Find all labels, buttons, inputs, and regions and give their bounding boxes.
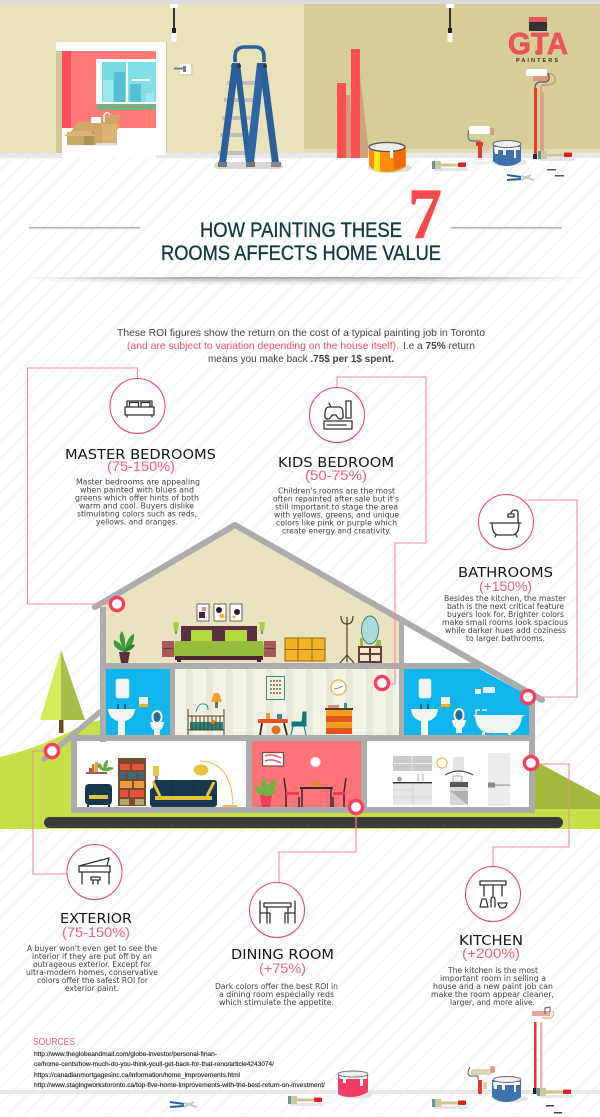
body text: interior if they are put off by an (32, 952, 152, 961)
connector line (33, 751, 67, 874)
brush (537, 1088, 573, 1098)
sources: SOURCES (33, 1036, 75, 1048)
ceiling lamps (170, 4, 454, 42)
teal chair (291, 712, 306, 735)
body text: warm and cool. Buyers dislike (79, 502, 194, 510)
screws (547, 169, 564, 176)
body text (75, 478, 200, 526)
roller (468, 1066, 495, 1094)
dining room (252, 741, 361, 807)
living room (76, 741, 246, 807)
oval mirror (362, 616, 378, 644)
heading: KITCHEN (459, 933, 523, 949)
attic furniture (114, 604, 382, 663)
body text: yellows, and oranges. (96, 518, 178, 526)
body text: Besides the kitchen, the master (444, 594, 567, 603)
wall lamp (211, 693, 222, 708)
ground and hills (0, 720, 600, 829)
body text: a dining room especially reds (219, 990, 334, 999)
right bathroom fixtures (411, 679, 525, 735)
plant (114, 631, 135, 663)
icon: piano (67, 844, 122, 900)
connector line (279, 815, 356, 883)
small yellow lamp (153, 766, 159, 782)
floor lamp (194, 761, 237, 807)
intro text: I.e a 75% return (403, 341, 475, 352)
yellow dresser (285, 638, 325, 661)
nursery wall (175, 669, 399, 736)
connector line (525, 500, 577, 697)
tree (40, 650, 85, 733)
header scene (0, 0, 600, 180)
body text: often repainted after sale but it's (273, 494, 399, 504)
title block: HOW PAINTING THESE (200, 219, 402, 242)
intro text (117, 328, 485, 365)
sources (33, 1036, 325, 1089)
icon: bed (110, 378, 165, 434)
body text: A buyer won't even get to see the (27, 944, 157, 953)
roof (95, 525, 542, 700)
percentage: (+200%) (462, 945, 520, 961)
body text: while darker hues add coziness (445, 626, 566, 635)
intro text: These ROI figures show the return on the cost of a typical painting job in Toronto (117, 328, 485, 339)
title shadow (20, 277, 590, 285)
panel: kids bedroom (273, 377, 426, 684)
body text: outrageous exterior. Except for (33, 960, 152, 969)
body text: buyers look for. Brighter colors (447, 610, 564, 619)
body text: larger, and more alive. (450, 998, 535, 1007)
body text: Master bedrooms are appealing (76, 478, 200, 486)
body text: house and a new paint job can (433, 982, 553, 991)
pliers (170, 1102, 197, 1107)
intro text: (and are subject to variation depending on the house itself). (127, 341, 399, 352)
attic room (103, 525, 401, 663)
house (44, 525, 542, 813)
panel: exterior (26, 751, 158, 993)
intro text: means you make back .75$ per 1$ spent. (208, 354, 394, 365)
blue paint can (491, 140, 527, 166)
body text: important room in selling a (440, 974, 546, 983)
shelf unit (358, 638, 382, 663)
body text: greens which offer hints of both (75, 494, 199, 502)
brush (288, 1096, 324, 1106)
doorway with view into room (56, 42, 167, 158)
small brush (432, 161, 468, 171)
percentage: (75-150%) (107, 458, 175, 474)
body text: exterior paint. (65, 984, 119, 993)
footer tools (170, 1007, 573, 1114)
alphabet poster (266, 676, 284, 700)
crib (188, 704, 224, 735)
sources: ce/home-cents/how-much-do-you-think-youll-get-back-for-that-reno/article4243074/ (34, 1061, 274, 1068)
left bathroom fixtures (108, 679, 164, 735)
pliers (507, 175, 534, 180)
armchair (85, 784, 112, 807)
heading: EXTERIOR (60, 911, 133, 927)
play table (258, 713, 288, 735)
brush (432, 1099, 468, 1109)
connector line (493, 764, 569, 867)
body text: colors like pink or purple which (276, 518, 397, 528)
bathroom right (404, 669, 529, 736)
wall pictures (197, 604, 242, 621)
icon: utensils (466, 866, 520, 922)
plant (255, 778, 277, 807)
wall clock (331, 680, 346, 695)
range and hood (445, 757, 473, 805)
percentage: (+75%) (259, 960, 306, 976)
body text: to larger bathrooms. (466, 634, 545, 643)
dining set (284, 778, 346, 807)
body text: when painted with blues and (80, 486, 194, 494)
wall switch (174, 64, 193, 76)
heading: BATHROOMS (458, 565, 553, 581)
small roller (468, 126, 494, 165)
red drawers (325, 703, 353, 734)
panel: kitchen (431, 764, 569, 1007)
body text (215, 982, 338, 1007)
icon: bathtub (478, 494, 534, 550)
body text: make small rooms look spacious (442, 618, 568, 627)
screws (546, 1105, 562, 1114)
road (44, 817, 563, 828)
percentage: (75-150%) (62, 924, 130, 940)
living room furniture (85, 758, 237, 807)
body text: Children's rooms are the most (278, 486, 395, 496)
body text: stimulating colors such as reds, (77, 510, 197, 518)
counter (393, 774, 432, 805)
orange paint can (368, 142, 412, 173)
body text: make the room appear cleaner, (431, 990, 554, 999)
cardboard boxes (64, 112, 122, 146)
bookcase (118, 758, 146, 806)
kitchen clock (437, 758, 447, 768)
body text (26, 944, 158, 993)
body text: which stimulate the appetite. (219, 998, 334, 1007)
wall shelf (86, 760, 114, 774)
sources: http://www.stagingworkstoronto.ca/top-five-home-improvements-with-the-best-return-on-investment/ (34, 1082, 325, 1089)
heading: KIDS BEDROOM (278, 455, 394, 471)
sofa (150, 780, 217, 807)
connector dots (45, 597, 538, 814)
icon: dining table (250, 882, 304, 938)
coat rack (340, 616, 354, 663)
kitchen room (367, 741, 529, 807)
body text: still important to stage the area (275, 502, 398, 512)
panel: dining room (215, 815, 356, 1007)
body text (431, 966, 554, 1007)
heading: MASTER BEDROOMS (65, 447, 216, 463)
tall rollers (532, 1007, 554, 1094)
sources: http://www.theglobeandmail.com/globe-investor/personal-finan- (34, 1051, 217, 1058)
title block: 7 (408, 174, 442, 254)
ladder (214, 47, 283, 169)
body text: bath is the next critical feature (447, 602, 564, 611)
body text: create energy and creativity. (282, 526, 391, 536)
connector line (337, 377, 426, 684)
icon: game console (310, 388, 364, 442)
logo: PAINTERS (516, 58, 558, 64)
clock (311, 757, 320, 767)
tall paint rollers (526, 69, 555, 159)
bed (173, 626, 265, 662)
logo: GTA (508, 26, 568, 61)
dining room furniture (255, 752, 346, 807)
house frame (71, 607, 535, 813)
body text: The kitchen is the most (447, 966, 538, 975)
bathroom left (105, 669, 170, 736)
kitchen furniture (393, 753, 510, 806)
nursery furniture (188, 676, 353, 735)
footer baseboard (0, 1090, 600, 1094)
picture (262, 752, 284, 766)
body text: Dark colors offer the best ROI in (215, 982, 338, 991)
percentage: (50-75%) (305, 467, 367, 483)
upper cabinets (393, 756, 432, 771)
wide brush (538, 151, 574, 161)
red paint swatches (337, 49, 368, 158)
pink paint can (338, 1071, 372, 1098)
blue paint can (492, 1076, 528, 1102)
body text: colors offer the safest ROI for (37, 976, 149, 985)
sources: https://canadianmortgagesinc.ca/information/home_improvements.html (34, 1072, 241, 1079)
nightstands and lamps (162, 622, 276, 657)
panel: master bedrooms (28, 368, 216, 604)
body text: with yellows, greens, and unique (274, 510, 399, 520)
panel: bathrooms (442, 494, 577, 697)
attic side gap (404, 622, 470, 663)
body text (273, 486, 399, 536)
title block (29, 174, 562, 265)
fridge (488, 753, 510, 806)
body text (442, 594, 568, 643)
percentage: (+150%) (479, 578, 532, 594)
body text: ultra-modern homes, conservative (26, 968, 158, 977)
lower roof (44, 712, 100, 759)
title block: ROOMS AFFECTS HOME VALUE (161, 242, 441, 265)
heading: DINING ROOM (231, 947, 334, 963)
connector line (28, 368, 138, 604)
